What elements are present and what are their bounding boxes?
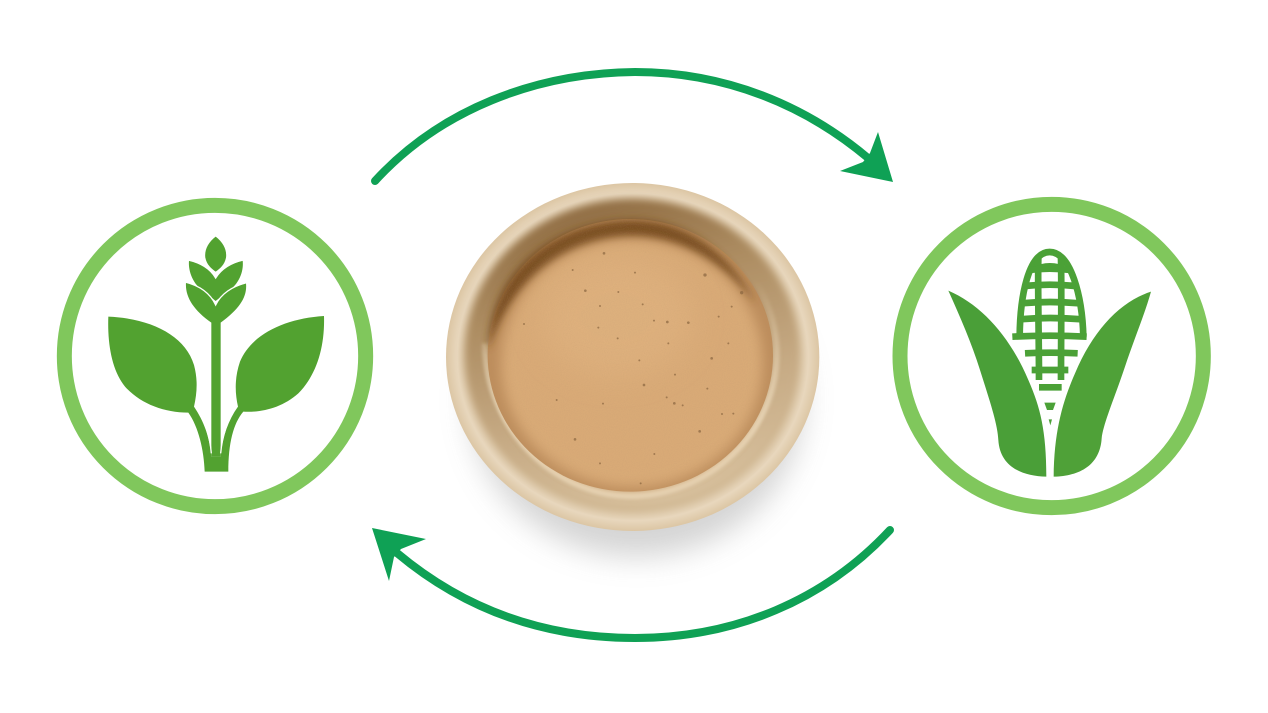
sauce surface bbox=[501, 239, 763, 487]
icon: plant in circle bbox=[64, 205, 366, 507]
bowl inner wall bbox=[465, 199, 799, 509]
bowl bbox=[446, 183, 819, 557]
bowl inner ring bbox=[485, 250, 777, 496]
plant glyph bbox=[108, 237, 324, 472]
sauce specks bbox=[523, 252, 743, 484]
corn ring bbox=[900, 204, 1203, 508]
corn cob base bbox=[1044, 403, 1056, 410]
plant ring bbox=[64, 205, 366, 507]
icon: corn in circle bbox=[900, 204, 1203, 508]
bowl rim bbox=[446, 183, 819, 531]
sauce highlight bbox=[540, 257, 693, 377]
sauce base bbox=[488, 219, 773, 492]
bowl shadow bbox=[470, 243, 803, 557]
arrow: top, plant to corn bbox=[375, 72, 893, 182]
sauce top shadow bbox=[488, 220, 755, 350]
plant stem gaps bbox=[185, 260, 247, 453]
sauce grain bbox=[488, 219, 773, 492]
arrow: bottom, corn to plant bbox=[372, 528, 890, 638]
corn cob bbox=[1012, 252, 1087, 387]
corn leaf: right bbox=[1054, 292, 1151, 477]
corn leaf: left bbox=[948, 291, 1046, 477]
